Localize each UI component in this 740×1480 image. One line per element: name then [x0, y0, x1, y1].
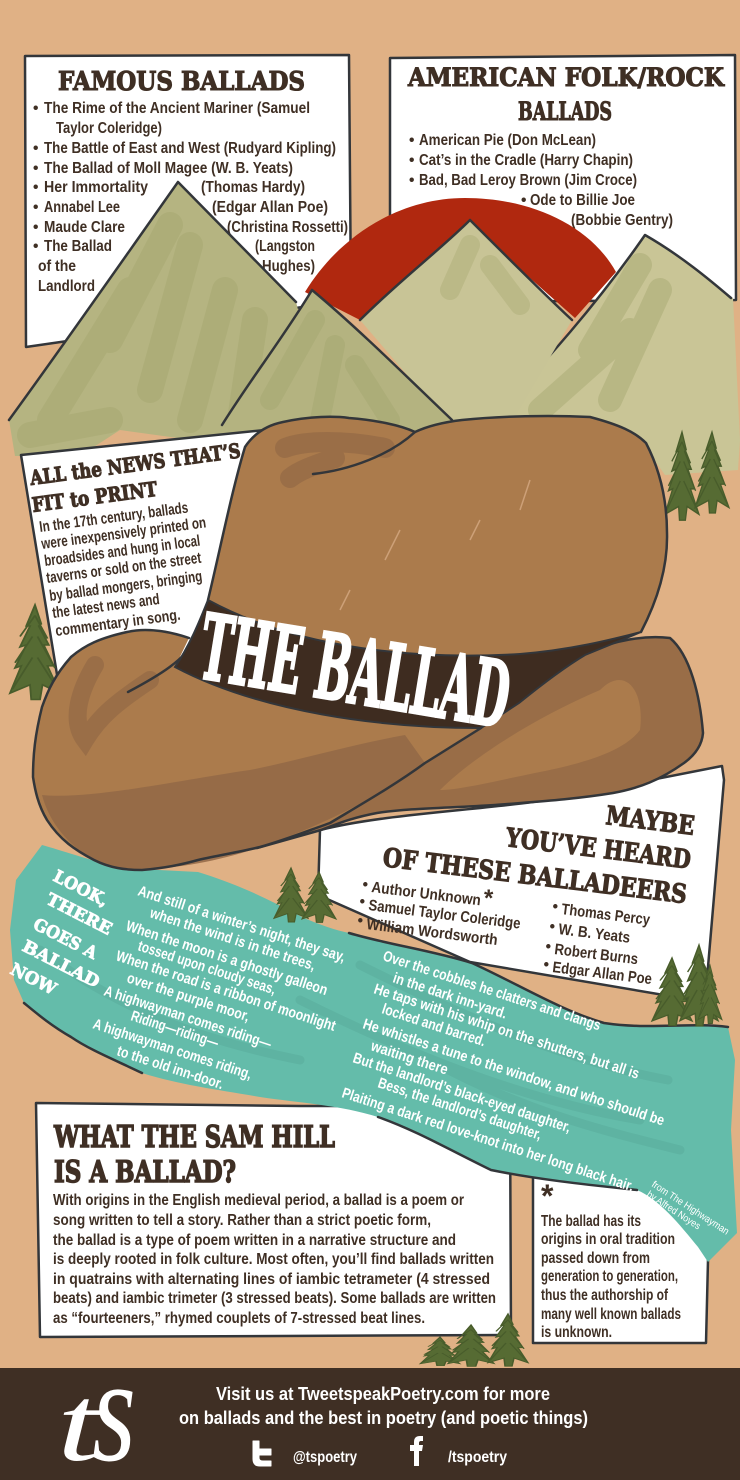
list: famous ballads: The Rime of the Ancient Mariner (Samuel	[44, 100, 310, 117]
list: famous ballads: •	[33, 140, 38, 157]
panel: asterisk note	[533, 1165, 708, 1343]
twitter handle: @tspoetry	[293, 1449, 357, 1466]
poem: first stanza: over the purple moor,	[125, 970, 252, 1025]
footer	[0, 1327, 740, 1480]
list: American ballads: (Bobbie Gentry)	[571, 212, 673, 229]
list: American ballads: •	[521, 192, 526, 209]
text: definition body: in quatrains with alternating lines of iambic tetrameter (4 stressed	[53, 1271, 490, 1288]
poem: second stanza: Plaiting a dark red love-knot into her long black hair.	[340, 1085, 636, 1195]
list: American ballads: Bad, Bad Leroy Brown (Jim Croce)	[419, 172, 637, 189]
poem: second stanza	[340, 948, 667, 1195]
text: definition body: beats) and iambic trimeter (3 stressed beats). Some ballads are written	[53, 1290, 496, 1307]
tree: right of hat	[665, 432, 699, 520]
facebook handle: /tspoetry	[448, 1449, 507, 1466]
list: balladeers right column: •	[545, 938, 552, 956]
text: oral tradition note: many well known ballads	[541, 1306, 681, 1323]
list: famous ballads: The Ballad	[44, 238, 112, 255]
heading: look, there goes a ballad now: BALLAD	[19, 937, 103, 993]
list: American ballads: Ode to Billie Joe	[530, 192, 635, 209]
list: American ballads: Cat’s in the Cradle (Harry Chapin)	[419, 152, 633, 169]
list: American ballads	[409, 132, 673, 229]
poem credit: by Alfred Noyes	[644, 1189, 702, 1232]
list: balladeers left column: *	[484, 885, 494, 912]
panel: maybe you've heard of these balladeers	[318, 766, 724, 1002]
list: balladeers left column: •	[362, 876, 369, 894]
text: definition body	[53, 1192, 496, 1327]
panel: all the news	[21, 430, 265, 705]
heading: all the news that's fit to print: FIT to PRINT	[31, 477, 159, 517]
heading: what the Sam Hill: IS A BALLAD?	[54, 1155, 236, 1190]
text: definition body: as “fourteeners,” rhymed couplets of 7-stressed beat lines.	[53, 1310, 425, 1327]
poem: second stanza: in the dark inn-yard.	[391, 970, 509, 1023]
text: news body: broadsides and hung in local	[43, 533, 201, 570]
list: balladeers left column: •	[359, 893, 366, 911]
text: oral tradition note: thus the authorship of	[541, 1287, 669, 1304]
heading: American folk/rock ballads	[407, 63, 725, 126]
list: famous ballads: •	[33, 238, 38, 255]
list: famous ballads: Her Immortality	[44, 179, 148, 196]
list: balladeers left column: William Wordsworth	[366, 916, 499, 949]
list: American ballads: American Pie (Don McLean)	[419, 132, 596, 149]
list: famous ballads: •	[33, 100, 38, 117]
list: famous ballads: (Edgar Allan Poe)	[212, 199, 328, 216]
list: balladeers right column: •	[552, 898, 559, 916]
hat crown	[208, 416, 667, 656]
heading: balladeers: MAYBE	[604, 801, 696, 842]
list: American ballads: •	[409, 132, 414, 149]
text: news body: In the 17th century, ballads	[38, 500, 189, 536]
list: balladeers left column: Author Unknown	[371, 879, 482, 909]
poem: first stanza: tossed upon cloudy seas,	[136, 938, 278, 998]
icon: facebook f	[410, 1436, 423, 1466]
text: oral tradition note: The ballad has its	[541, 1213, 641, 1230]
list: balladeers left column: •	[357, 912, 364, 930]
text: oral tradition note: origins in oral tradition	[541, 1231, 675, 1248]
poem: second stanza: Bess, the landlord’s daughter,	[376, 1075, 544, 1144]
list: famous ballads: •	[33, 179, 38, 196]
panel: what the Sam Hill is a ballad	[36, 1103, 511, 1337]
text: definition body: the ballad is a type of poem written in a narrative structure and	[53, 1232, 456, 1249]
heading: what the Sam Hill: WHAT THE SAM HILL	[53, 1120, 335, 1155]
list: famous ballads: (Christina Rossetti)	[227, 219, 348, 236]
list: famous ballads: (Thomas Hardy)	[201, 179, 305, 196]
list: balladeers right column: Edgar Allan Poe	[552, 959, 653, 988]
hat band	[175, 594, 641, 749]
text: definition body: is deeply rooted in folk culture. Most often, you’ll find ballads written	[53, 1251, 494, 1268]
heading: balladeers	[381, 801, 696, 910]
teal river banner	[7, 845, 737, 1262]
poem: first stanza: A highwayman comes riding—	[102, 983, 273, 1053]
text: news body: the latest news and	[51, 591, 161, 622]
mountain: center	[360, 220, 572, 425]
heading: look, there goes a ballad now: LOOK,	[50, 867, 111, 911]
mountain: far left	[9, 182, 330, 456]
list: balladeers left column: Samuel Taylor Coleridge	[368, 897, 522, 933]
poem: first stanza: to the old inn-door.	[115, 1043, 226, 1093]
list: famous ballads: Landlord	[38, 278, 95, 295]
list: American ballads: •	[409, 152, 414, 169]
poem: first stanza: when the wind is in the trees,	[147, 904, 318, 974]
icon: twitter t	[253, 1441, 271, 1466]
list: famous ballads: •	[33, 219, 38, 236]
poem: second stanza: He taps with his whip on the shutters, but all is	[372, 981, 641, 1083]
heading: balladeers: OF THESE BALLADEERS	[381, 843, 689, 910]
heading: American folk/rock ballads: AMERICAN FOLK/ROCK	[407, 63, 725, 92]
asterisk: *	[541, 1178, 554, 1214]
poem credit: from The Highwayman	[649, 1179, 731, 1238]
tree: bottom group	[420, 1314, 528, 1366]
text: oral tradition note: is unknown.	[541, 1324, 612, 1341]
tree: left of hat	[10, 605, 60, 700]
text: news body	[38, 500, 207, 640]
call to action text: on ballads and the best in poetry (and poetic things)	[179, 1408, 588, 1428]
heading: balladeers: YOU’VE HEARD	[503, 823, 692, 876]
poem: second stanza: Over the cobbles he clatters and clangs	[381, 948, 603, 1034]
list: famous ballads: The Ballad of Moll Magee (W. B. Yeats)	[44, 160, 293, 177]
tree: right of hat, second	[695, 432, 729, 513]
heading: look, there goes a ballad now: NOW	[7, 960, 60, 1000]
text: oral tradition note	[541, 1213, 681, 1341]
call to action text: Visit us at TweetspeakPoetry.com for more	[216, 1384, 550, 1404]
poem: first stanza: Riding—riding—	[129, 1008, 221, 1052]
heading: look, there goes a ballad now: THERE	[43, 890, 115, 940]
list: balladeers right column	[543, 898, 653, 988]
red sun	[305, 198, 616, 320]
heading: all the news that's fit to print: ALL the NEWS THAT’S	[28, 438, 242, 490]
list: famous ballads: (Langston	[255, 238, 315, 255]
mountains	[9, 182, 740, 475]
list: famous ballads: of the	[38, 258, 76, 275]
poem: second stanza: waiting there	[368, 1037, 450, 1079]
mountain: front middle	[222, 290, 454, 446]
poem: first stanza: And still of a winter’s night, they say,	[136, 883, 347, 966]
text: news body: by ballad mongers, bringing	[48, 568, 203, 605]
list: famous ballads: Taylor Coleridge)	[56, 120, 162, 137]
list: famous ballads: Maude Clare	[44, 219, 125, 236]
list: balladeers right column: Robert Burns	[554, 941, 639, 968]
list: famous ballads: Annabel Lee	[44, 199, 120, 216]
text: news body: taverns or sold on the street	[45, 550, 202, 587]
text: oral tradition note: passed down from	[541, 1250, 650, 1267]
mountain: right	[490, 235, 740, 475]
poem: first stanza: When the moon is a ghostly galleon	[124, 918, 330, 999]
text: definition body: song written to tell a story. Rather than a strict poetic form,	[53, 1212, 431, 1229]
list: balladeers right column: •	[549, 918, 556, 936]
poem: first stanza	[91, 883, 347, 1093]
poem: second stanza: He whistles a tune to the window, and who should be	[361, 1016, 667, 1129]
text: news body: commentary in song.	[54, 607, 181, 640]
poem: second stanza: locked and barred.	[380, 1001, 488, 1050]
list: balladeers right column: •	[543, 956, 550, 974]
heading: look, there goes a ballad now	[7, 867, 115, 1000]
tree: middle pair	[274, 868, 336, 922]
heading: what the Sam Hill	[53, 1120, 335, 1190]
list: American ballads: •	[409, 172, 414, 189]
text: oral tradition note: generation to generation,	[541, 1268, 678, 1285]
hat	[33, 416, 703, 870]
heading: all the news that's fit to print	[28, 438, 242, 517]
call to action text	[179, 1384, 588, 1428]
poem: second stanza: But the landlord’s black-eyed daughter,	[351, 1050, 573, 1136]
heading: famous ballads: FAMOUS BALLADS	[58, 67, 305, 97]
list: balladeers left column	[357, 876, 522, 949]
poem: first stanza: When the road is a ribbon of moonlight	[114, 948, 338, 1035]
tree: right group	[652, 945, 722, 1026]
panel: American folk/rock ballads	[390, 55, 736, 302]
logo: ts	[57, 1327, 136, 1480]
hat brim left	[33, 630, 481, 870]
poem: first stanza: A highwayman comes riding,	[91, 1016, 254, 1083]
list: famous ballads: The Battle of East and West (Rudyard Kipling)	[44, 140, 336, 157]
list: balladeers right column: Thomas Percy	[561, 901, 651, 929]
list: famous ballads: Hughes)	[262, 258, 315, 275]
list: famous ballads: •	[33, 160, 38, 177]
list: balladeers right column: W. B. Yeats	[558, 921, 631, 947]
text: news body: were inexpensively printed on	[40, 514, 207, 553]
panel: famous ballads	[25, 55, 351, 347]
list: famous ballads: •	[33, 199, 38, 216]
heading: look, there goes a ballad now: GOES A	[30, 915, 101, 964]
heading: American folk/rock ballads: BALLADS	[518, 97, 612, 126]
list: famous ballads	[33, 100, 348, 295]
text: definition body: With origins in the English medieval period, a ballad is a poem or	[53, 1192, 464, 1209]
hat brim right	[257, 637, 703, 848]
